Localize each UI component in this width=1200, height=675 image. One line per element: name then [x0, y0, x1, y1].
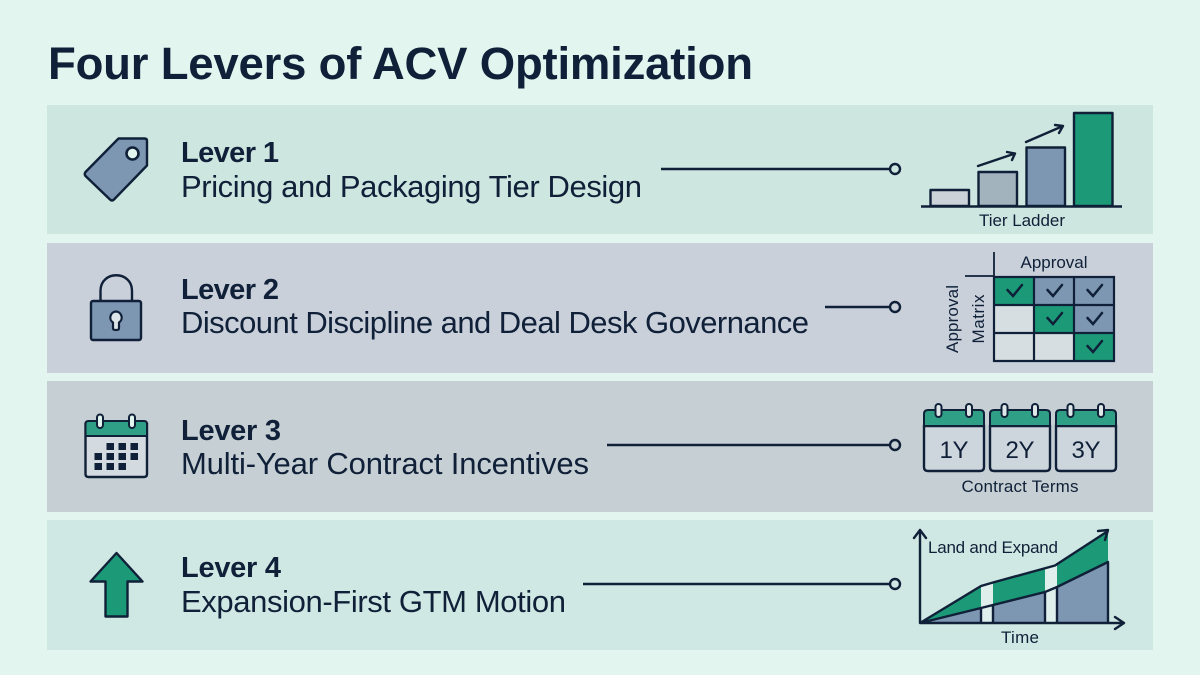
calendar 3Y: 3Y — [1072, 437, 1100, 464]
panel: lever 4 — [47, 520, 1153, 650]
lever 2 text: Lever 2 — [181, 274, 279, 306]
panel: lever 2 — [47, 243, 1153, 373]
chart: land and expand — [914, 530, 1124, 647]
arrow: tier step 1 — [978, 152, 1015, 166]
icon: up arrow — [90, 553, 142, 616]
connector line 2 — [825, 302, 900, 312]
matrix label side — [943, 285, 988, 353]
lever 2 text — [181, 274, 809, 340]
chart: approval matrix — [943, 252, 1114, 361]
calendar 3Y — [1056, 404, 1116, 471]
axis label: Time — [1001, 628, 1039, 647]
matrix label side: Matrix — [969, 294, 988, 344]
lever 1 text: Pricing and Packaging Tier Design — [181, 169, 642, 204]
lever 4 text: Expansion-First GTM Motion — [181, 584, 566, 619]
axes — [914, 530, 1124, 629]
matrix label side: Approval — [943, 285, 962, 353]
chart label: Contract Terms — [962, 477, 1078, 496]
lever 3 text: Lever 3 — [181, 415, 281, 447]
chart: contract term calendars — [924, 404, 1116, 496]
arrow: tier step 2 — [1026, 125, 1063, 142]
lever 1 text — [181, 137, 642, 204]
matrix label top: Approval — [1020, 253, 1088, 272]
chart label: Tier Ladder — [979, 211, 1065, 230]
connector line 3 — [607, 440, 900, 450]
connector line 1 — [661, 164, 900, 174]
title: Four Levers of ACV Optimization — [48, 38, 753, 89]
lever 3 text: Multi-Year Contract Incentives — [181, 446, 589, 481]
panel: lever 3 — [47, 381, 1153, 512]
calendar 1Y: 1Y — [940, 437, 968, 464]
calendar 1Y — [924, 404, 984, 471]
lever 3 text — [181, 415, 589, 481]
lever 4 text — [181, 552, 566, 619]
calendar 2Y: 2Y — [1006, 437, 1034, 464]
panel: lever 1 — [47, 105, 1153, 234]
icon: padlock — [91, 275, 141, 340]
lever 2 text: Discount Discipline and Deal Desk Governance — [181, 305, 809, 340]
lever 1 text: Lever 1 — [181, 137, 279, 169]
chart: tier ladder — [921, 113, 1122, 230]
chart label: Land and Expand — [928, 538, 1058, 557]
icon: price tag — [85, 138, 147, 200]
lever 4 text: Lever 4 — [181, 552, 281, 584]
icon: calendar — [86, 414, 147, 477]
calendar 2Y — [990, 404, 1050, 471]
connector line 4 — [583, 579, 900, 589]
